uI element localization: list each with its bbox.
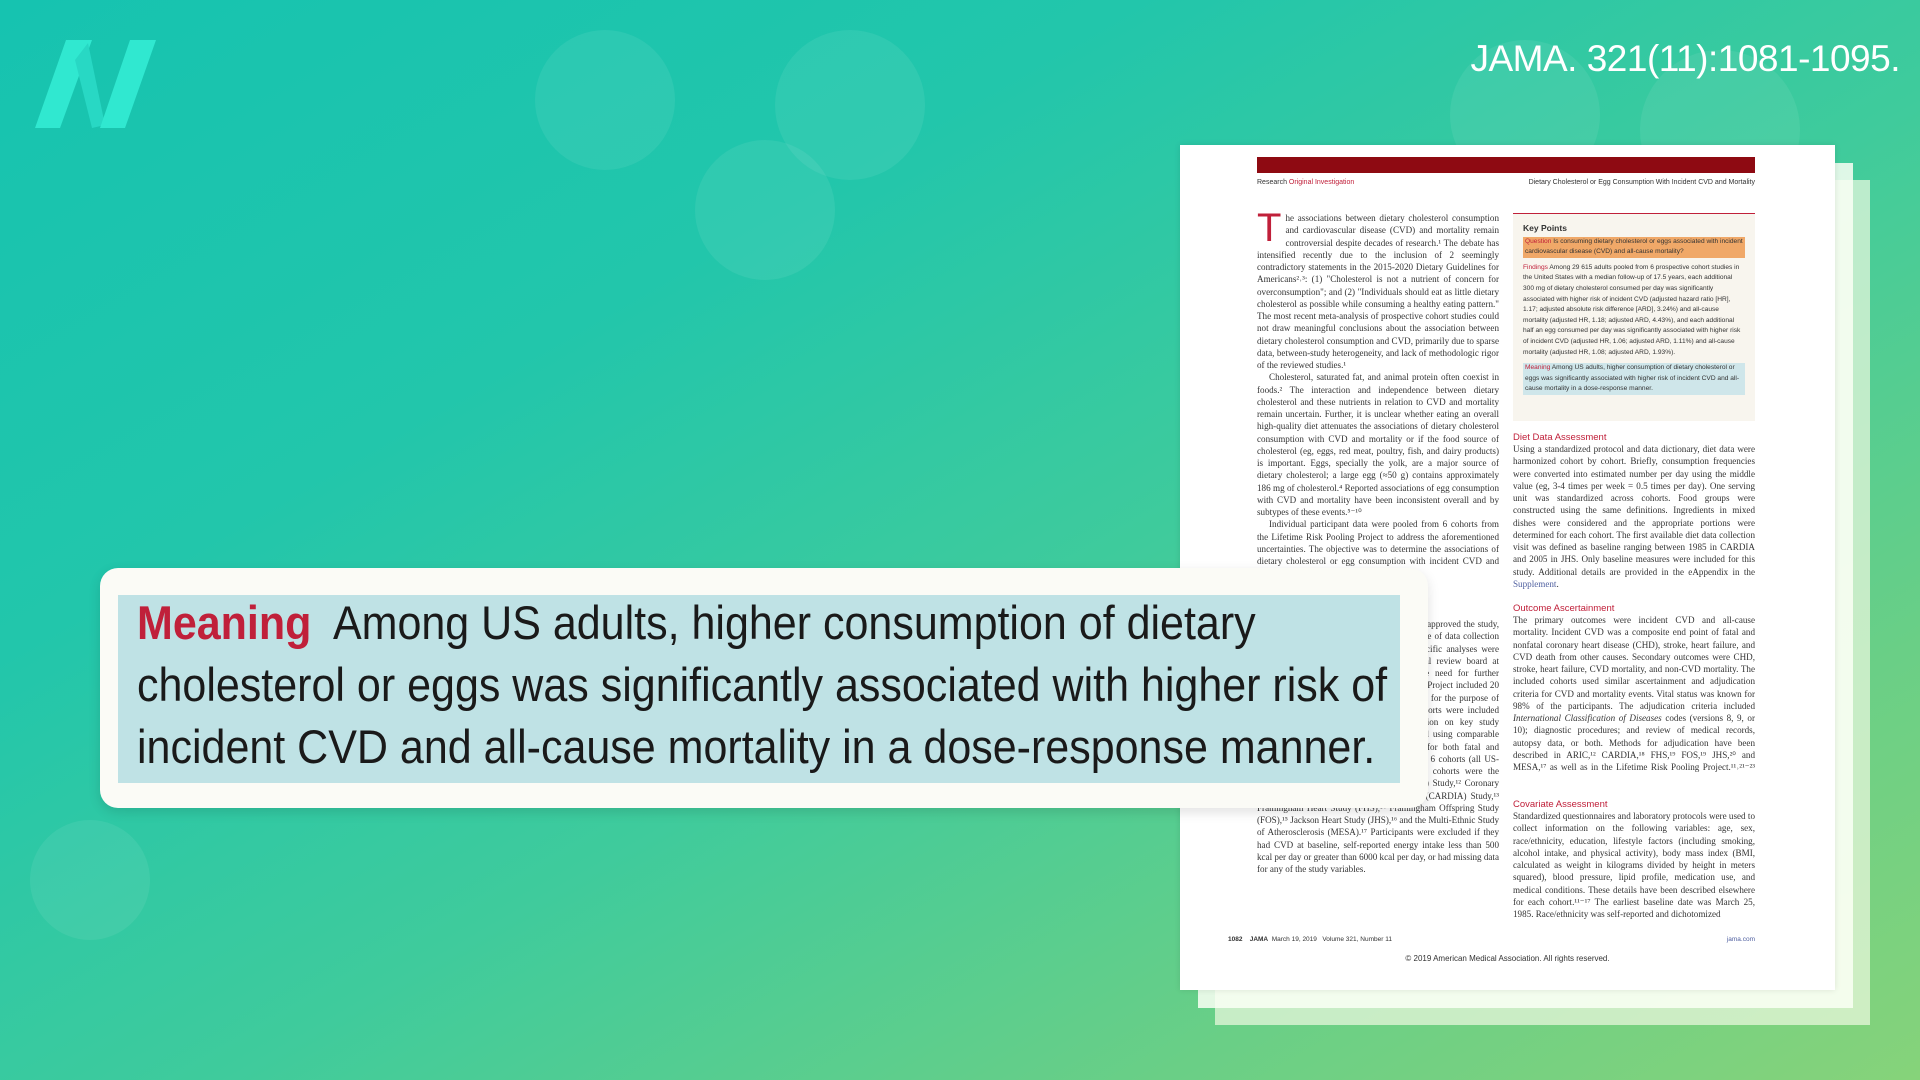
- callout text box: cholesterol or eggs was significantly associated with higher risk of: [137, 658, 1387, 711]
- article page: Research Original Investigation: [1257, 179, 1354, 186]
- left column: [1257, 212, 1499, 874]
- key points box: Meaning Among US adults, higher consumption of dietary cholesterol or eggs was significantly associated with higher risk of incident CVD and all-cause mortality in a dose-response manner.: [1525, 364, 1739, 392]
- callout text box: incident CVD and all-cause mortality in a dose-response manner.: [137, 720, 1375, 773]
- key points box: Question Is consuming dietary cholesterol or eggs associated with incident cardiovascular disease (CVD) and all-cause mortality?: [1525, 238, 1743, 255]
- key points box: Findings Among 29 615 adults pooled from 6 prospective cohort studies in the United States with a median follow-up of 17.5 years, each additional 300 mg of dietary cholesterol consumed per day was significantly associated with higher risk of incident CVD (adjusted hazard ratio [HR], 1.17; adjusted absolute risk difference [ARD], 3.24%) and all-cause mortality (adjusted HR, 1.18; adjusted ARD, 4.43%), and each additional half an egg consumed per day was significantly associated with higher risk of incident CVD (adjusted HR, 1.06; adjusted ARD, 1.11%) and all-cause mortality (adjusted HR, 1.08; adjusted ARD, 1.93%).: [1523, 264, 1740, 356]
- article page: Covariate Assessment: [1513, 799, 1608, 810]
- logo: N: [35, 40, 156, 128]
- article page: jama.com: [1727, 936, 1755, 943]
- callout text box: [118, 595, 1400, 783]
- article page: Outcome Ascertainment: [1513, 603, 1614, 614]
- paper stack: [1179, 144, 1870, 1025]
- callout: meaning: [100, 568, 1428, 808]
- left column: Individual participant data were pooled from 6 cohorts from the Lifetime Risk Pooling Project to address the aforementioned uncertainties. The objective was to determine the associations of dietary cholesterol or egg consumption with incident CVD and all-cause mortality.: [1257, 519, 1499, 578]
- article page: Using a standardized protocol and data dictionary, diet data were harmonized cohort by cohort. Briefly, consumption frequencies were converted into estimated number per day using the middle value (eg, 3-4 times per week = 0.5 times per day). One serving unit was standardized across cohorts. Food groups were constructed using the same definitions. Ingredients in mixed dishes were considered and the appropriate portions were determined for each cohort. The first available diet data collection visit was defined as baseline ranging between 1985 in CARDIA and 2005 in JHS. Only baseline measures were included for this study. Additional details are provided in the eAppendix in the Supplement.: [1513, 444, 1755, 589]
- key points box: Key Points: [1523, 223, 1567, 233]
- article page: © 2019 American Medical Association. All rights reserved.: [1405, 954, 1610, 963]
- page footer: 1082 JAMA March 19, 2019 Volume 321, Number 11: [1228, 936, 1392, 943]
- article page: [1228, 157, 1755, 963]
- left column: he associations between dietary cholesterol consumption and cardiovascular disease (CVD) and mortality remain controversial despite decades of research.¹ The debate has intensified recently due to the inclusion of 2 seemingly contradictory statements in the 2015-2020 Dietary Guidelines for Americans²˒³: (1) "Cholesterol is not a nutrient of concern for overconsumption"; and (2) "Individuals should eat as little dietary cholesterol as possible while consuming a healthy eating pattern." The most recent meta-analysis of prospective cohort studies could not draw meaningful conclusions about the association between dietary cholesterol consumption and CVD, primarily due to sparse data, between-study heterogeneity, and lack of methodologic rigor of the reviewed studies.¹: [1257, 213, 1499, 370]
- article page: Standardized questionnaires and laboratory protocols were used to collect information on the following variables: age, sex, race/ethnicity, education, lifestyle factors (including smoking, alcohol intake, and physical activity), body mass index (BMI, calculated as weight in kilograms divided by height in meters squared), blood pressure, lipid profile, medication use, and medical conditions. These details have been described elsewhere for each cohort.¹¹⁻¹⁷ The earliest baseline date was March 25, 1985. Race/ethnicity was self-reported and dichotomized: [1513, 811, 1755, 919]
- citation: JAMA. 321(11):1081-1095.: [1470, 38, 1900, 79]
- key points box: [1513, 213, 1755, 421]
- left column: Cholesterol, saturated fat, and animal protein often coexist in foods.² The interaction and independence between dietary cholesterol and these nutrients in relation to CVD and mortality remain uncertain. Further, it is unclear whether eating an overall high-quality diet attenuates the associations of dietary cholesterol consumption with CVD and mortality or if the food source of cholesterol (eg, eggs, red meat, poultry, fish, and dairy products) is important. Eggs, specially the yolk, are a major source of dietary cholesterol; a large egg (≈50 g) contains approximately 186 mg of cholesterol.⁴ Reported associations of egg consumption with CVD and mortality have been inconsistent overall and by subtypes of these events.⁵⁻¹⁰: [1257, 372, 1499, 517]
- callout text box: Meaning Among US adults, higher consumption of dietary: [137, 596, 1256, 649]
- left column: Methods: [1257, 594, 1292, 604]
- article page: Diet Data Assessment: [1513, 432, 1606, 443]
- left column: The institutional review board at each site approved the study, and informed consent was obtained at the time of data collection in each cohort. Using deidentified data, specific analyses were approved for this report by the institutional review board at Northwestern University, which waived the need for further informed consent. The Lifetime Risk Pooling Project included 20 community-based cohorts, designed primarily for the purpose of studying lifetime patterns of CVD risk. Cohorts were included that each assessed diet and had information on key study variables; cohorts with dietary data collected using comparable instruments and with long-term follow-up for both fatal and nonfatal events were considered eligible, and 6 cohorts (all US-based) were included in this analysis. The cohorts were the Atherosclerosis Risk in Communities (ARIC) Study,¹² Coronary Artery Risk Development in Young Adults (CARDIA) Study,¹³ Framingham Heart Study (FHS),¹⁴ Framingham Offspring Study (FOS),¹⁵ Jackson Heart Study (JHS),¹⁶ and the Multi-Ethnic Study of Atherosclerosis (MESA).¹⁷ Participants were excluded if they had CVD at baseline, self-reported energy intake less than 500 kcal per day or greater than 6000 kcal per day, or had missing data for any of the study variables.: [1257, 619, 1499, 874]
- article page: Dietary Cholesterol or Egg Consumption With Incident CVD and Mortality: [1529, 179, 1755, 186]
- left column: Study Population: [1257, 607, 1326, 617]
